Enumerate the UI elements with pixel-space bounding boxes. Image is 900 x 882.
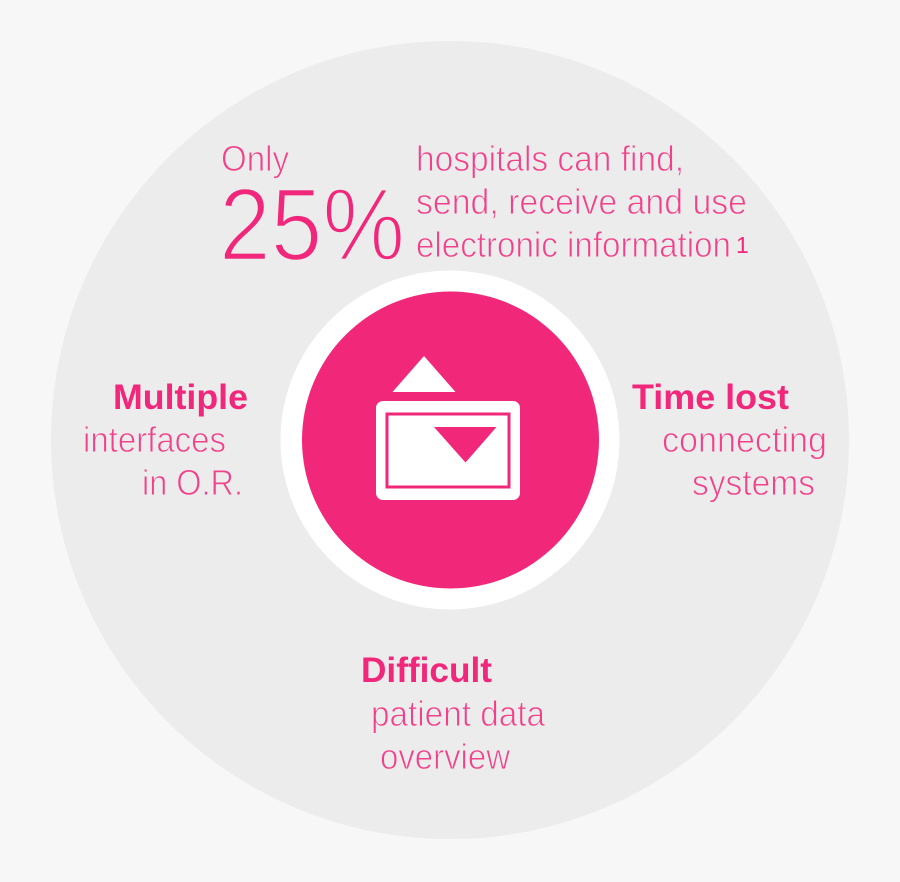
icon: screen with up and down arrows — [376, 356, 520, 500]
label: only: Only — [221, 138, 289, 179]
line: systems: systems — [692, 462, 815, 503]
icon: up triangle — [392, 356, 456, 392]
line: overview: overview — [380, 736, 511, 777]
big number: 25%: 25% — [219, 167, 405, 282]
line: patient data: patient data — [371, 693, 546, 734]
text block: time lost — [632, 378, 827, 503]
white ring — [280, 270, 620, 610]
line: interfaces: interfaces — [83, 419, 226, 460]
statistic: only 25% — [219, 138, 405, 282]
heading: multiple: Multiple — [113, 378, 248, 417]
text block: difficult — [361, 651, 546, 777]
line: connecting: connecting — [662, 419, 827, 460]
icon: screen inner outline — [387, 414, 509, 487]
statistic description — [416, 138, 749, 265]
icon: down triangle — [434, 427, 496, 462]
icon: screen frame — [376, 401, 520, 500]
pink centre circle — [302, 292, 599, 588]
footnote marker: 1 — [736, 232, 749, 258]
heading: difficult: Difficult — [361, 651, 492, 690]
line: in O.R.: in O.R. — [142, 462, 243, 503]
heading: time lost: Time lost — [632, 378, 789, 417]
description line 3: electronic information — [416, 224, 731, 265]
description line 1: hospitals can find, — [416, 138, 684, 179]
text block: multiple interfaces — [83, 378, 248, 503]
description line 2: send, receive and use — [416, 181, 747, 222]
